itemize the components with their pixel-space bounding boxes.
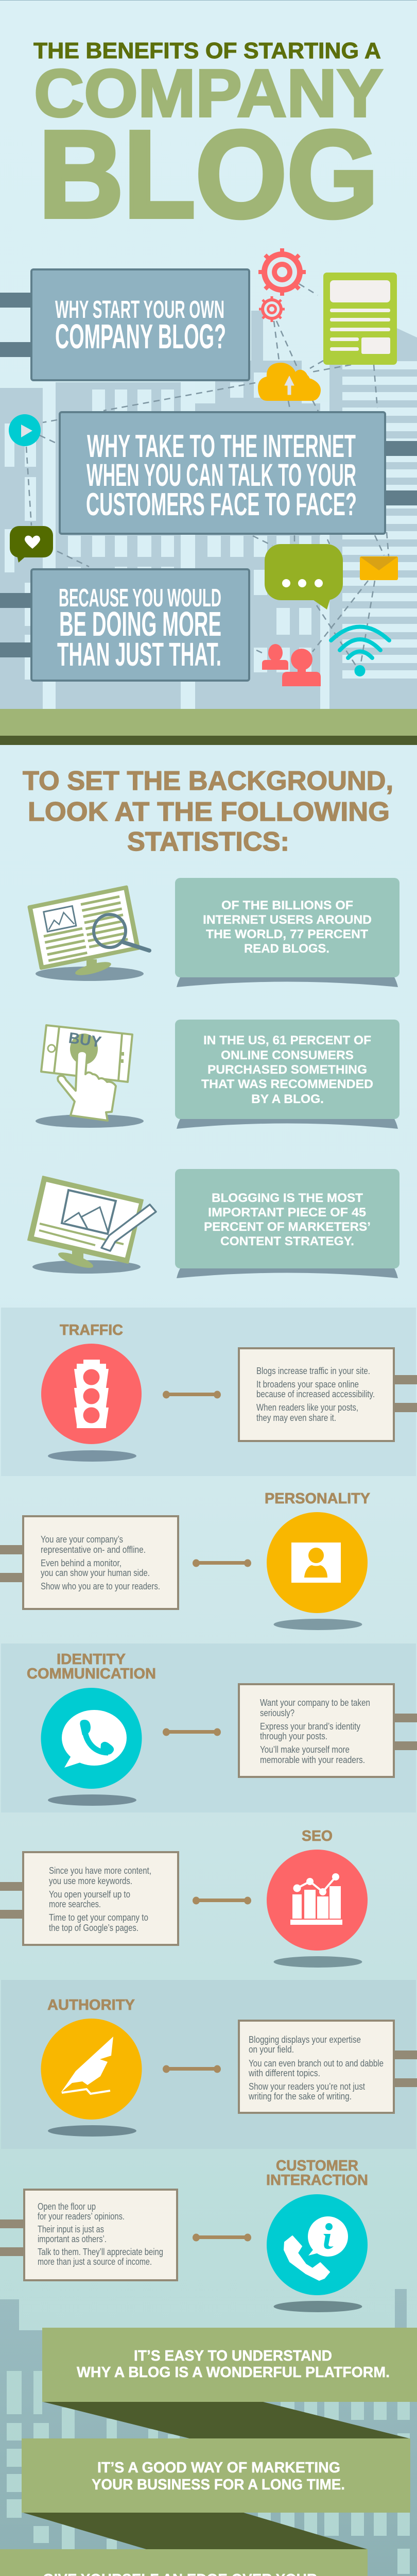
- ribbon: wonderful platform: IT’S EASY TO UNDERSTAND: [134, 2348, 332, 2364]
- ribbon: good way of marketing: YOUR BUSINESS FOR A LONG TIME.: [92, 2477, 345, 2493]
- sign: authority text: writing for the sake of writing.: [248, 2091, 352, 2102]
- ribbon: edge over competitors: [0, 2549, 368, 2576]
- section: traffic: [1, 1308, 417, 1476]
- title line: blog: BLOG: [39, 105, 378, 243]
- sign: seo text: you use more keywords.: [49, 1876, 132, 1886]
- stat card: 77 percent: [175, 878, 399, 987]
- stat card: 61 percent: ONLINE CONSUMERS: [221, 1048, 354, 1062]
- sign: customer interaction text: [0, 2190, 177, 2280]
- stat card: 77 percent: THE WORLD, 77 PERCENT: [206, 927, 368, 941]
- sign: identity text: You’ll make yourself more: [260, 1744, 350, 1755]
- section: customer interaction: [0, 2158, 368, 2312]
- sign: authority text: [239, 2021, 417, 2113]
- connector: [163, 1391, 221, 1398]
- stat card: 77 percent: OF THE BILLIONS OF: [221, 899, 353, 912]
- ribbon: good way of marketing: IT’S A GOOD WAY OF MARKETING: [97, 2460, 340, 2476]
- sign: customer interaction text: important as others’.: [38, 2234, 107, 2244]
- sign: seo text: Since you have more content,: [49, 1866, 151, 1876]
- lower city skyline: [0, 2289, 417, 2576]
- section: authority: [1, 1980, 417, 2149]
- shadow: [48, 2125, 136, 2137]
- sign: traffic text: It broadens your space online: [256, 1379, 359, 1389]
- city skyline background: [0, 311, 417, 709]
- ground strip: [0, 709, 417, 745]
- sign: traffic text: because of increased accessibility.: [256, 1389, 375, 1399]
- circle icon: feather quill: [41, 2019, 142, 2120]
- icon: play button: [9, 414, 41, 446]
- heading: customer interaction: [266, 2158, 368, 2189]
- stat card: 45 percent: [175, 1169, 399, 1278]
- stat card: 61 percent: THAT WAS RECOMMENDED: [201, 1077, 373, 1091]
- connector: [193, 1559, 251, 1567]
- icon: envelope: [360, 556, 398, 580]
- stat card: 77 percent: INTERNET USERS AROUND: [203, 913, 372, 927]
- icon: chat bubble: [265, 544, 343, 609]
- heading: customer interaction: INTERACTION: [266, 2172, 368, 2189]
- title line: company: COMPANY: [34, 55, 383, 131]
- sign: personality text: representative on- and offline.: [41, 1545, 146, 1555]
- stat card: 61 percent: IN THE US, 61 PERCENT OF: [203, 1033, 371, 1047]
- sign: traffic text: [239, 1348, 417, 1441]
- dashed network connections: [26, 278, 389, 666]
- connector: [163, 1728, 221, 1736]
- ribbon: wonderful platform: [42, 2328, 417, 2438]
- sign: seo text: more searches.: [49, 1899, 101, 1909]
- heading: identity communication: IDENTITY: [57, 1651, 126, 1668]
- sign: seo text: You open yourself up to: [49, 1889, 130, 1900]
- icon: monitor with magnifier: [27, 885, 149, 981]
- stat card: 77 percent: READ BLOGS.: [244, 942, 329, 956]
- heading: identity communication: [27, 1651, 156, 1682]
- connector: [193, 1897, 251, 1904]
- icon: document: [323, 273, 397, 365]
- section: seo: [0, 1828, 368, 1968]
- sign: authority text: with different topics.: [248, 2068, 320, 2078]
- shadow: [274, 2301, 362, 2312]
- icon: hand tapping phone buy button: BUY: [67, 1029, 102, 1051]
- sign: authority text: Show your readers you’re not just: [249, 2081, 365, 2092]
- statistics heading: LOOK AT THE FOLLOWING: [28, 797, 390, 827]
- sign: customer interaction text: Their input is just as: [38, 2224, 104, 2234]
- sign: identity text: memorable with your readers.: [260, 1755, 365, 1765]
- stat card: 45 percent: CONTENT STRATEGY.: [220, 1234, 354, 1248]
- sign: authority text: You can even branch out to and dabble: [249, 2058, 384, 2069]
- icon: cloud upload: [258, 363, 321, 401]
- ribbon: good way of marketing: [22, 2438, 410, 2549]
- sign: seo text: Time to get your company to: [49, 1912, 148, 1923]
- sign: identity text: [239, 1684, 417, 1777]
- sign: traffic text: When readers like your posts,: [256, 1402, 358, 1413]
- circle icon: phone and info bubble: [267, 2194, 368, 2295]
- icon: monitor with pen: [28, 1176, 156, 1274]
- title: [33, 39, 383, 243]
- heading: traffic: TRAFFIC: [60, 1322, 123, 1338]
- heading: authority: AUTHORITY: [47, 1997, 135, 2013]
- sign: customer interaction text: more than just a source of income.: [38, 2257, 152, 2267]
- sign: identity text: seriously?: [260, 1708, 294, 1718]
- icon: wifi: [331, 626, 389, 676]
- stat card: 45 percent: PERCENT OF MARKETERS’: [204, 1220, 371, 1234]
- icon: hand tapping phone buy button: [36, 1025, 144, 1128]
- heading: seo: SEO: [302, 1828, 333, 1844]
- heading: identity communication: COMMUNICATION: [27, 1666, 156, 1682]
- circle icon: traffic light: [41, 1344, 142, 1444]
- sign: customer interaction text: Talk to them. They’ll appreciate being: [38, 2247, 163, 2257]
- billboard: why start your own company blog: [0, 269, 249, 380]
- sign: traffic text: Blogs increase traffic in your site.: [256, 1366, 370, 1376]
- billboard: why start your own company blog: WHY START YOUR OWN: [55, 296, 224, 324]
- icon: heart speech bubble: [10, 526, 53, 563]
- sign: identity text: through your posts.: [260, 1731, 327, 1741]
- icon: small gear: [259, 296, 285, 322]
- sign: identity text: Express your brand’s identity: [260, 1721, 360, 1732]
- shadow: [274, 1619, 362, 1630]
- sign: authority text: on your field.: [249, 2044, 294, 2055]
- statistics heading: STATISTICS:: [127, 827, 289, 857]
- title line: the benefits of starting a: THE BENEFITS OF STARTING A: [33, 39, 381, 63]
- stat card: 45 percent: IMPORTANT PIECE OF 45: [208, 1206, 366, 1219]
- circle icon: profile portrait: [267, 1512, 368, 1613]
- sign: customer interaction text: for your readers’ opinions.: [38, 2211, 125, 2222]
- sign: authority text: Blogging displays your expertise: [249, 2035, 361, 2045]
- sign: personality text: you can show your human side.: [41, 1568, 150, 1578]
- icon: people: [262, 644, 321, 686]
- billboard: because you would be doing more: THAN JUST THAT.: [57, 636, 221, 673]
- ribbon: wonderful platform: WHY A BLOG IS A WONDERFUL PLATFORM.: [77, 2364, 390, 2381]
- billboard: because you would be doing more: [0, 569, 249, 681]
- sign: seo text: the top of Google’s pages.: [49, 1923, 138, 1933]
- circle icon: bar chart: [267, 1850, 368, 1951]
- billboard: why take to the internet: [60, 412, 417, 534]
- statistics heading: TO SET THE BACKGROUND,: [23, 766, 393, 796]
- stat card: 61 percent: [175, 1020, 399, 1129]
- section: personality: [0, 1490, 370, 1630]
- section: identity communication: [1, 1643, 417, 1812]
- statistics heading: [23, 766, 393, 857]
- stat card: 45 percent: BLOGGING IS THE MOST: [212, 1191, 363, 1205]
- sign: traffic text: they may even share it.: [256, 1413, 336, 1423]
- connector: [163, 2065, 221, 2073]
- billboard: because you would be doing more: BE DOING MORE: [59, 605, 221, 643]
- billboard: because you would be doing more: BECAUSE YOU WOULD: [59, 584, 221, 612]
- circle icon: phone bubble: [41, 1688, 142, 1789]
- shadow: [274, 1956, 362, 1968]
- icon: large gear: [258, 248, 306, 296]
- sign: personality text: You are your company’s: [41, 1534, 123, 1545]
- billboard: why start your own company blog: COMPANY BLOG?: [55, 317, 226, 356]
- sign: customer interaction text: Open the floor up: [38, 2201, 96, 2212]
- sign: seo text: [0, 1852, 178, 1945]
- heading: customer interaction: CUSTOMER: [276, 2158, 358, 2174]
- stat card: 61 percent: PURCHASED SOMETHING: [207, 1063, 367, 1077]
- sign: identity text: Want your company to be taken: [260, 1698, 370, 1708]
- connector: [193, 2234, 251, 2241]
- shadow: [48, 1450, 136, 1462]
- sign: personality text: Even behind a monitor,: [41, 1558, 121, 1568]
- heading: personality: PERSONALITY: [265, 1490, 370, 1507]
- stat card: 61 percent: BY A BLOG.: [251, 1092, 324, 1106]
- sign: personality text: [0, 1516, 178, 1609]
- shadow: [48, 1794, 136, 1806]
- sign: personality text: Show who you are to your readers.: [41, 1581, 160, 1591]
